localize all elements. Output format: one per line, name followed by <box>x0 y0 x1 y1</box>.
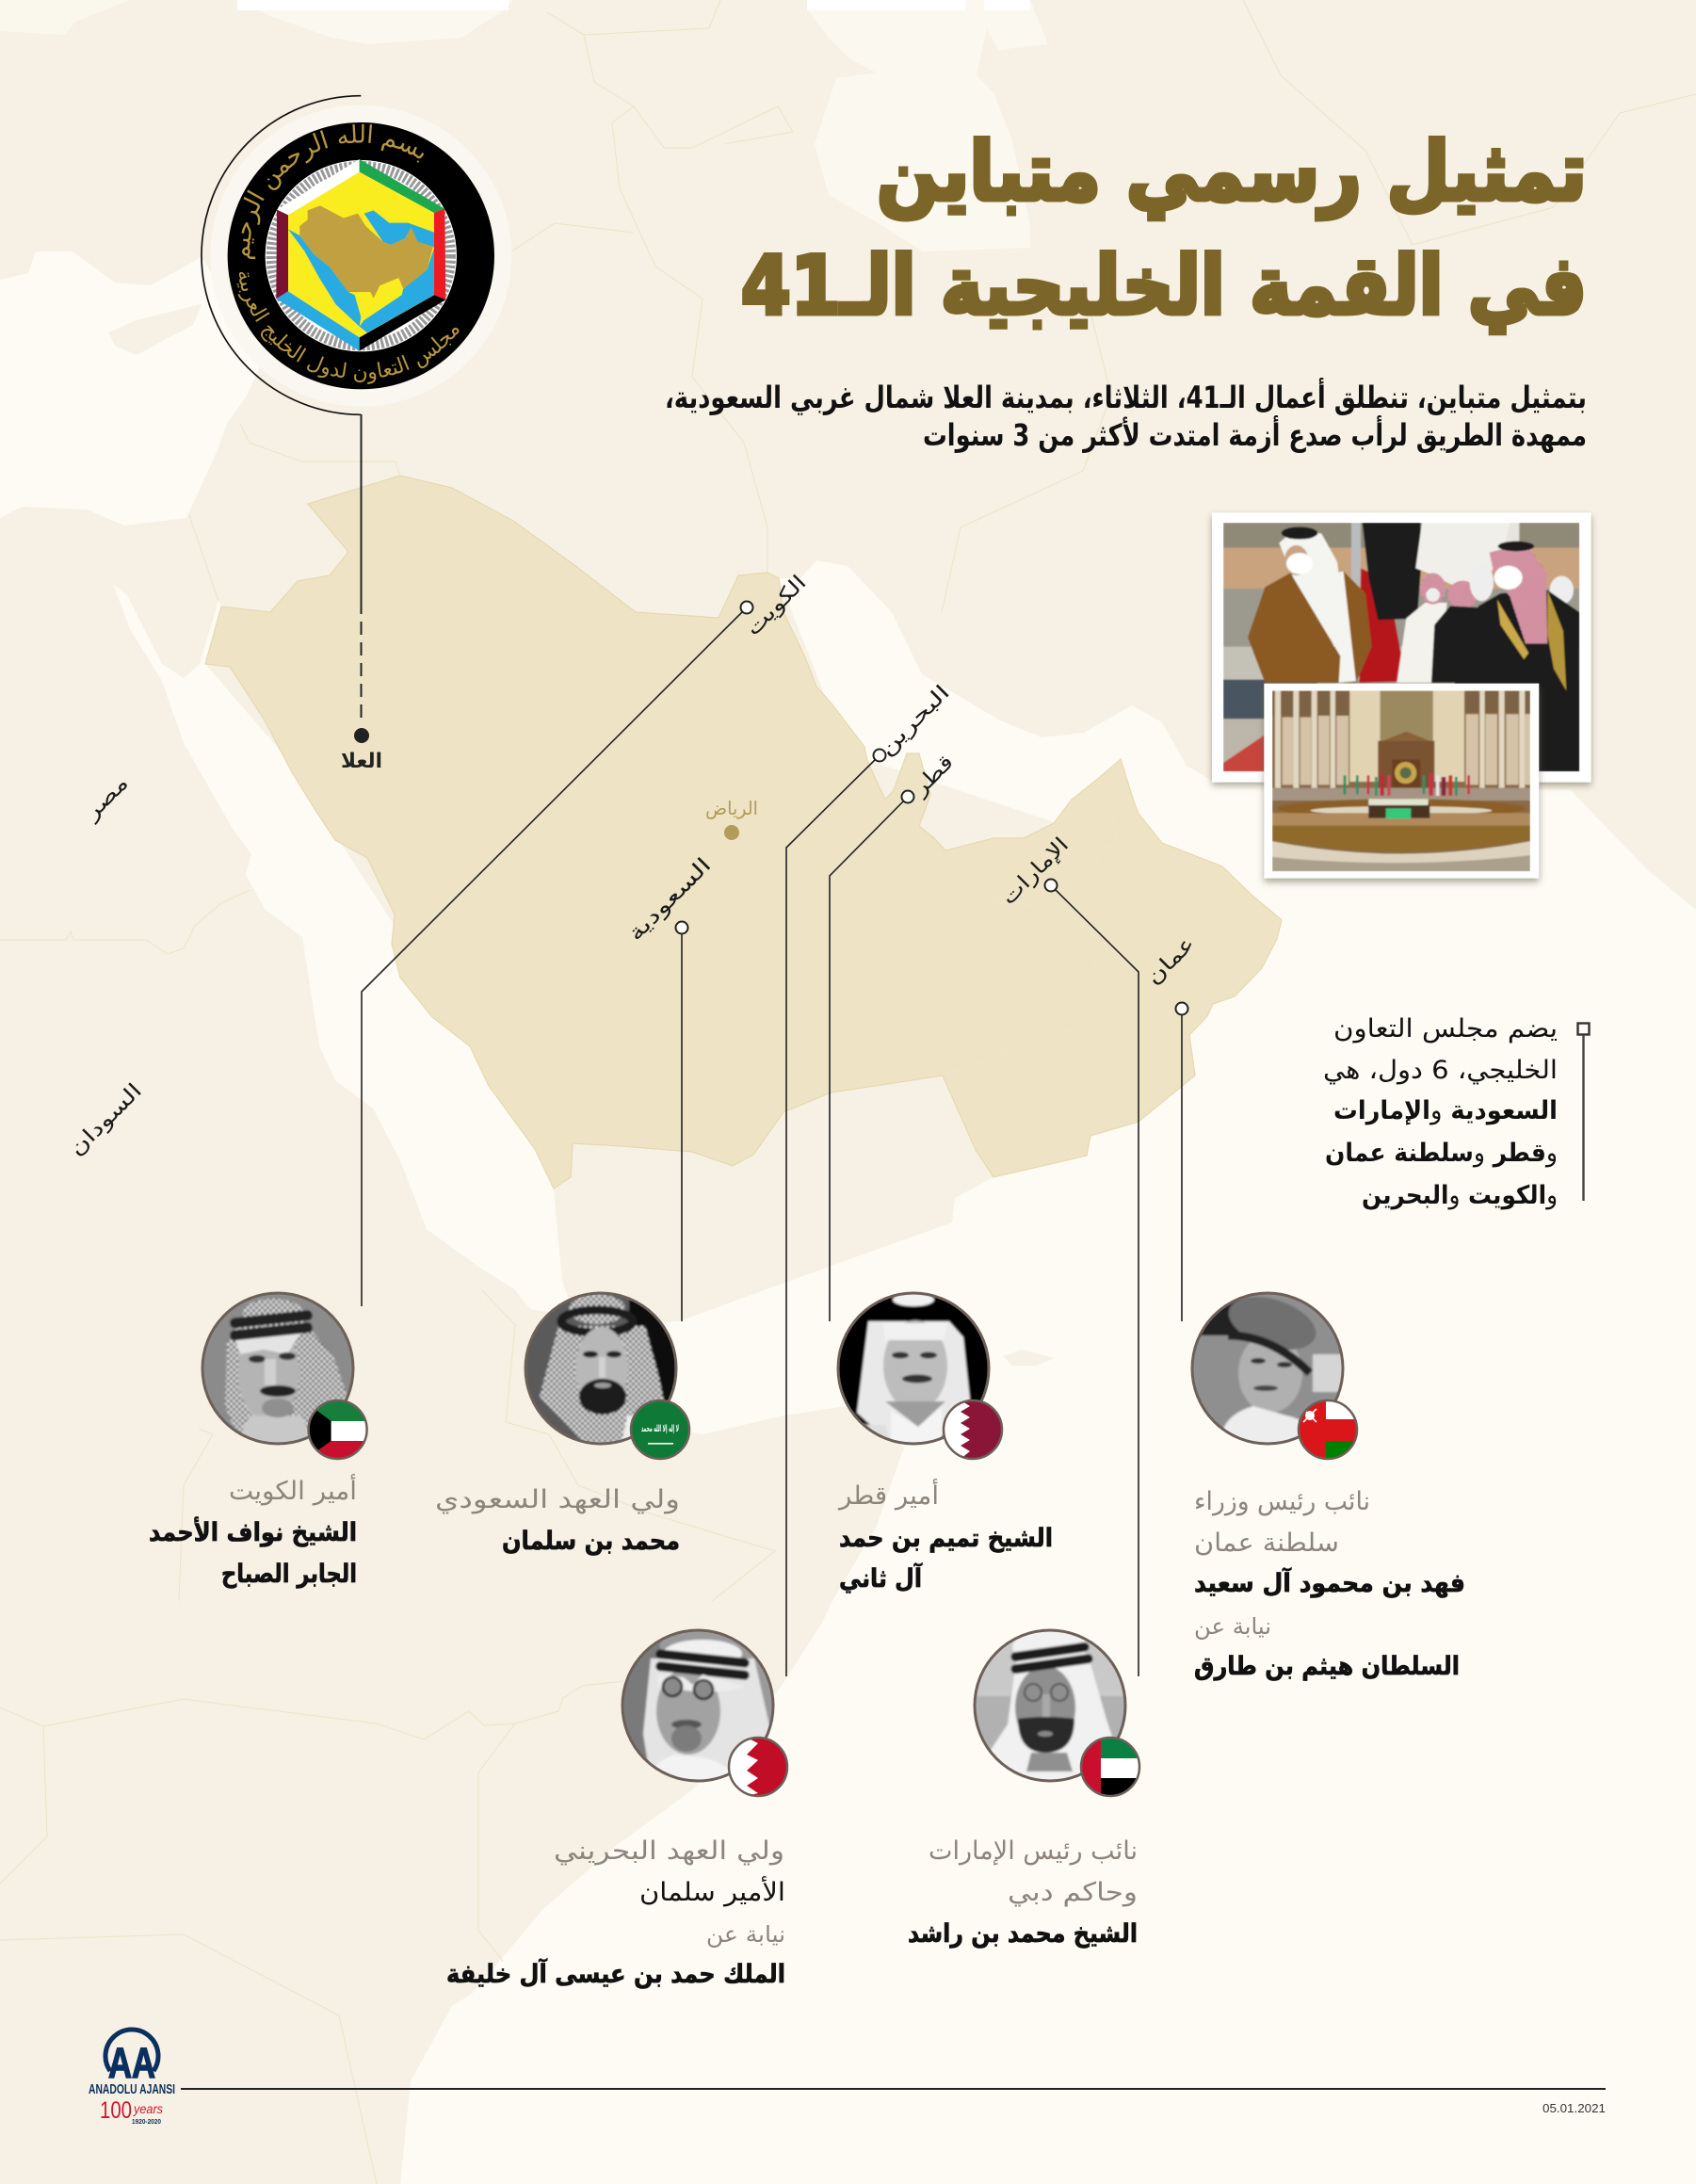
GCC emblem <box>201 94 512 416</box>
callout: GCC members: السعودية والإمارات <box>1333 1096 1558 1125</box>
text: Kuwait: الجابر الصباح <box>221 1560 357 1589</box>
map labels: البحرين <box>875 681 955 761</box>
title: تمثيل رسمي متباين <box>877 125 1587 219</box>
leader line to Al-Ula <box>354 414 369 743</box>
text: Kuwait: الشيخ نواف الأحمد <box>149 1516 357 1547</box>
text: Oman: فهد بن محمود آل سعيد <box>1194 1567 1465 1598</box>
map labels: السودان <box>65 1079 147 1161</box>
Anadolu Agency logo: ANADOLU AJANSI <box>89 2081 175 2097</box>
date: 05.01.2021 <box>1543 2101 1606 2115</box>
callout marker <box>1578 1023 1590 1201</box>
text: Oman: سلطنة عمان <box>1194 1529 1339 1558</box>
map: GCC countries <box>205 476 1282 1189</box>
portrait: Bahrain crown prince <box>622 1630 773 1781</box>
Anadolu Agency logo: 1920-2020 <box>132 2117 161 2126</box>
Anadolu Agency logo: years <box>133 2101 163 2116</box>
portrait: Qatar emir <box>838 1293 989 1444</box>
text: Oman: السلطان هيثم بن طارق <box>1194 1652 1460 1681</box>
map labels: السعودية <box>623 853 717 946</box>
text: UAE <box>908 1836 1138 1949</box>
leader lines to portraits <box>362 601 1188 1676</box>
map labels <box>65 571 1200 1161</box>
text: Qatar: الشيخ تميم بن حمد <box>839 1524 1053 1553</box>
photos <box>1212 512 1591 882</box>
map labels: الإمارات <box>997 833 1074 910</box>
portrait: Saudi crown prince <box>525 1293 676 1444</box>
text: Qatar <box>837 1478 1053 1594</box>
flag: Kuwait <box>309 1400 367 1459</box>
map labels: قطر <box>908 751 959 801</box>
photo: summit hall <box>1264 684 1539 882</box>
portrait: Kuwait emir <box>202 1293 353 1444</box>
label: Al-Ula: العلا <box>341 750 382 773</box>
flag: UAE <box>1081 1738 1139 1796</box>
map: top strip <box>237 0 1030 10</box>
callout: GCC members: يضم مجلس التعاون <box>1333 1014 1558 1043</box>
text: Bahrain: نيابة عن <box>706 1921 785 1948</box>
text: Saudi Arabia: محمد بن سلمان <box>502 1527 680 1556</box>
text: Bahrain <box>446 1836 785 1989</box>
text: Saudi Arabia: ولي العهد السعودي <box>435 1485 680 1514</box>
GCC emblem: بسم الله الرحمن الرحيم <box>241 124 424 260</box>
map: Cyprus <box>108 304 202 355</box>
map labels: مصر <box>79 771 134 826</box>
GCC emblem: مجلس التعاون لدول الخليج العربية <box>237 271 460 384</box>
title <box>741 125 1587 333</box>
text: UAE: وحاكم دبي <box>1008 1878 1138 1907</box>
map labels: عمان <box>1142 932 1200 990</box>
text: Saudi Arabia <box>435 1485 680 1556</box>
text: UAE: الشيخ محمد بن راشد <box>908 1919 1138 1949</box>
text: UAE: نائب رئيس الإمارات <box>929 1836 1138 1866</box>
portrait: UAE vice president <box>975 1630 1125 1781</box>
map labels: الكويت <box>741 571 812 641</box>
flag: Saudi Arabia <box>631 1400 689 1459</box>
Anadolu Agency logo: AA <box>108 2039 155 2087</box>
intro text <box>665 378 1587 453</box>
Anadolu Agency logo <box>89 2030 175 2126</box>
photo: leaders arriving <box>1212 512 1591 785</box>
label: Riyadh: الرياض <box>705 797 758 819</box>
title: في القمة الخليجية الـ41 <box>741 239 1587 333</box>
callout: GCC members: والكويت والبحرين <box>1362 1181 1558 1210</box>
map: Yemen land <box>554 1064 993 1328</box>
text: Bahrain: الملك حمد بن عيسى آل خليفة <box>446 1958 785 1989</box>
callout: GCC members: وقطر وسلطنة عمان <box>1325 1139 1558 1168</box>
flag: Bahrain <box>729 1738 787 1796</box>
callout: GCC members: الخليجي، 6 دول، هي <box>1323 1056 1558 1085</box>
intro text: بتمثيل متباين، تنطلق أعمال الـ41، الثلاثاء، بمدينة العلا شمال غربي السعودية، <box>665 378 1587 415</box>
flag: Qatar <box>944 1400 1002 1459</box>
label: Riyadh <box>705 797 758 840</box>
text: Oman: نائب رئيس وزراء <box>1194 1487 1370 1516</box>
callout: GCC members <box>1323 1014 1590 1210</box>
text: Qatar: آل ثاني <box>839 1562 923 1594</box>
text: Qatar: أمير قطر <box>837 1478 939 1511</box>
text: Kuwait <box>149 1473 357 1589</box>
text: Kuwait: أمير الكويت <box>229 1473 357 1506</box>
text: Bahrain: ولي العهد البحريني <box>554 1836 784 1866</box>
map: Socotra island <box>1003 1350 1055 1366</box>
text: Bahrain: الأمير سلمان <box>639 1875 785 1907</box>
portrait: Oman deputy PM <box>1192 1286 1343 1444</box>
flag: Saudi Arabia: لا إله إلا الله محمد <box>641 1424 679 1434</box>
flag: Oman <box>1299 1400 1357 1459</box>
text: Oman: نيابة عن <box>1194 1613 1271 1640</box>
footer rule <box>181 2088 1606 2090</box>
text: Oman <box>1194 1487 1465 1681</box>
Anadolu Agency logo: 100 <box>100 2097 132 2124</box>
